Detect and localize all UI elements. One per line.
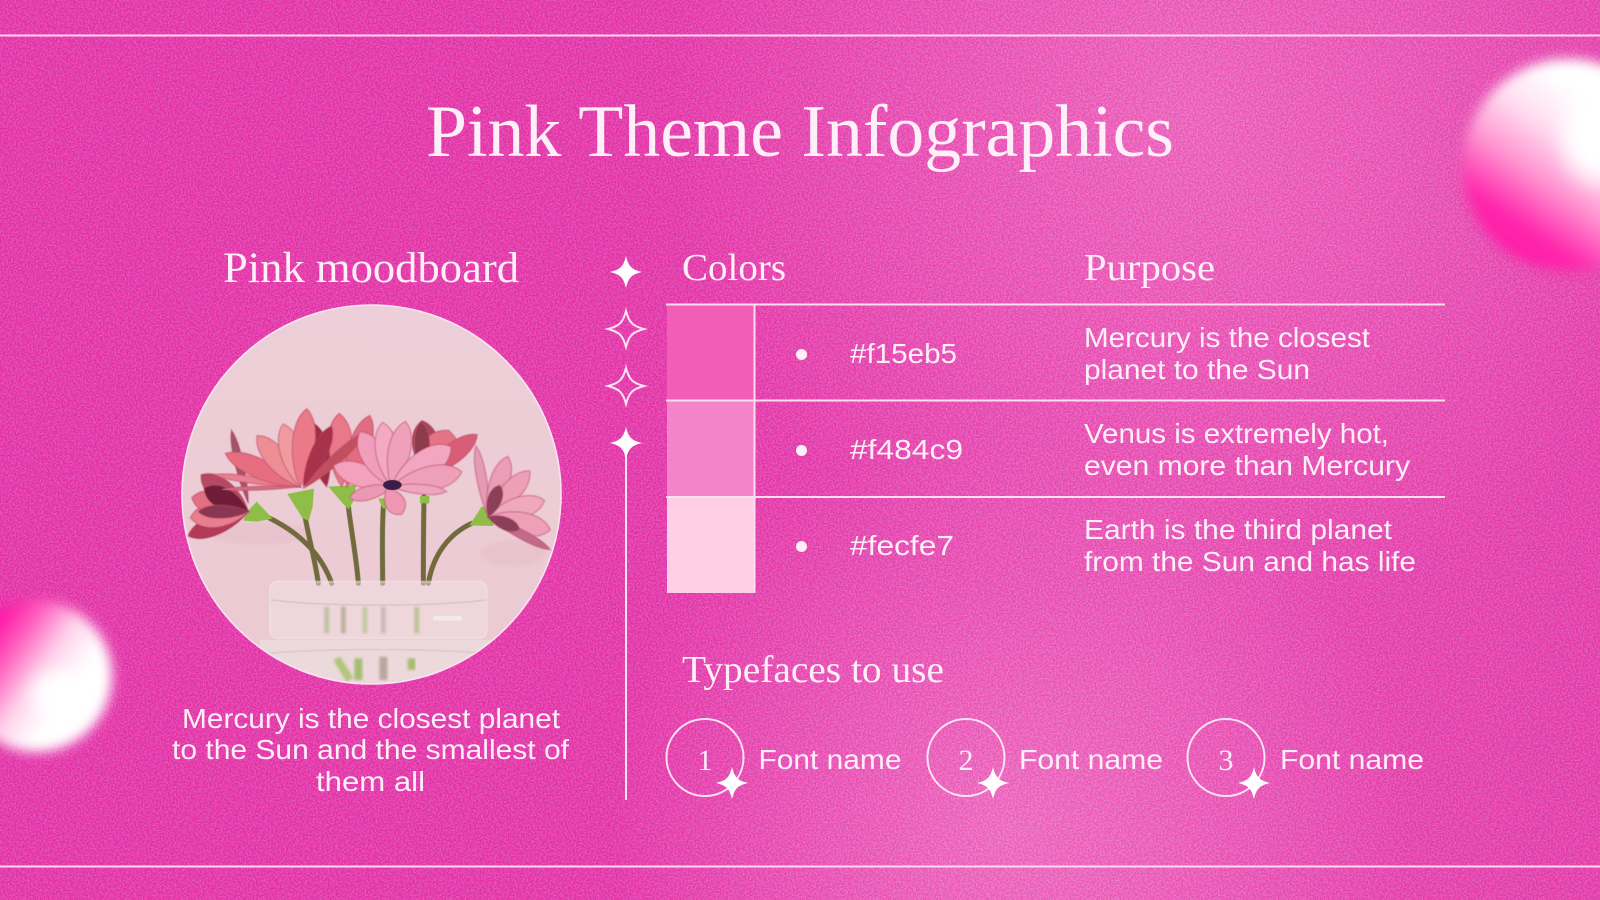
bottom rule <box>0 866 1600 868</box>
moodboard heading: Pink moodboard <box>223 245 519 292</box>
icon: filled star <box>610 256 642 288</box>
font item 3: 3 <box>1218 744 1234 777</box>
back flower 3 <box>329 412 352 488</box>
left flower <box>187 511 250 540</box>
font item 3 <box>1188 719 1424 799</box>
moodboard caption: them all <box>316 766 425 797</box>
flower 2 <box>213 472 300 488</box>
swatch f484c9 <box>667 401 754 497</box>
row 1 <box>796 322 1370 385</box>
stems <box>270 497 472 583</box>
row 2: #f484c9 <box>850 434 963 465</box>
font item 1: Font name <box>758 744 902 775</box>
font item 2 <box>928 719 1163 799</box>
calyxes <box>243 485 493 526</box>
moodboard caption <box>172 703 569 797</box>
back flower <box>412 420 436 456</box>
swatch f15eb5 <box>667 305 754 401</box>
font item 2: Font name <box>1019 744 1163 775</box>
row 2 <box>796 418 1410 481</box>
row 3: from the Sun and has life <box>1084 546 1416 577</box>
top rule <box>0 34 1600 36</box>
icon: outline star <box>608 368 644 404</box>
row 3: #fecfe7 <box>850 530 954 561</box>
row 2: Venus is extremely hot, <box>1084 418 1389 449</box>
font item 1: 1 <box>698 744 712 777</box>
swatch fecfe7 <box>667 497 754 593</box>
typefaces heading: Typefaces to use <box>682 649 944 691</box>
purpose heading: Purpose <box>1084 247 1215 289</box>
photo: flowers in a glass jar <box>180 303 563 690</box>
panel: moodboard <box>172 245 569 797</box>
font item 1 <box>666 719 902 799</box>
right flower <box>473 444 490 520</box>
moodboard caption: Mercury is the closest planet <box>182 703 560 734</box>
row 3 <box>796 514 1416 577</box>
title: Pink Theme Infographics <box>426 91 1174 173</box>
decorative orb: bottom left <box>0 600 112 752</box>
row 2: even more than Mercury <box>1084 450 1410 481</box>
row 1: planet to the Sun <box>1084 354 1310 385</box>
centre flower <box>334 460 384 488</box>
row 1: Mercury is the closest <box>1084 322 1370 353</box>
panel: typefaces <box>666 649 1424 799</box>
icon: outline star <box>608 311 644 347</box>
soft shadows <box>210 522 547 567</box>
table lines <box>666 304 1445 593</box>
font item 2: 2 <box>958 744 974 777</box>
icon: filled star <box>610 427 642 459</box>
timeline of stars <box>608 256 644 800</box>
font item 3: Font name <box>1280 744 1424 775</box>
glass jar <box>270 582 487 638</box>
panel: colors table <box>666 247 1445 593</box>
decorative orb: top right <box>1463 59 1600 271</box>
row 1: #f15eb5 <box>850 338 957 369</box>
row 3: Earth is the third planet <box>1084 514 1392 545</box>
moodboard caption: to the Sun and the smallest of <box>172 734 569 765</box>
colors heading: Colors <box>682 247 786 289</box>
photo ring <box>182 305 561 684</box>
